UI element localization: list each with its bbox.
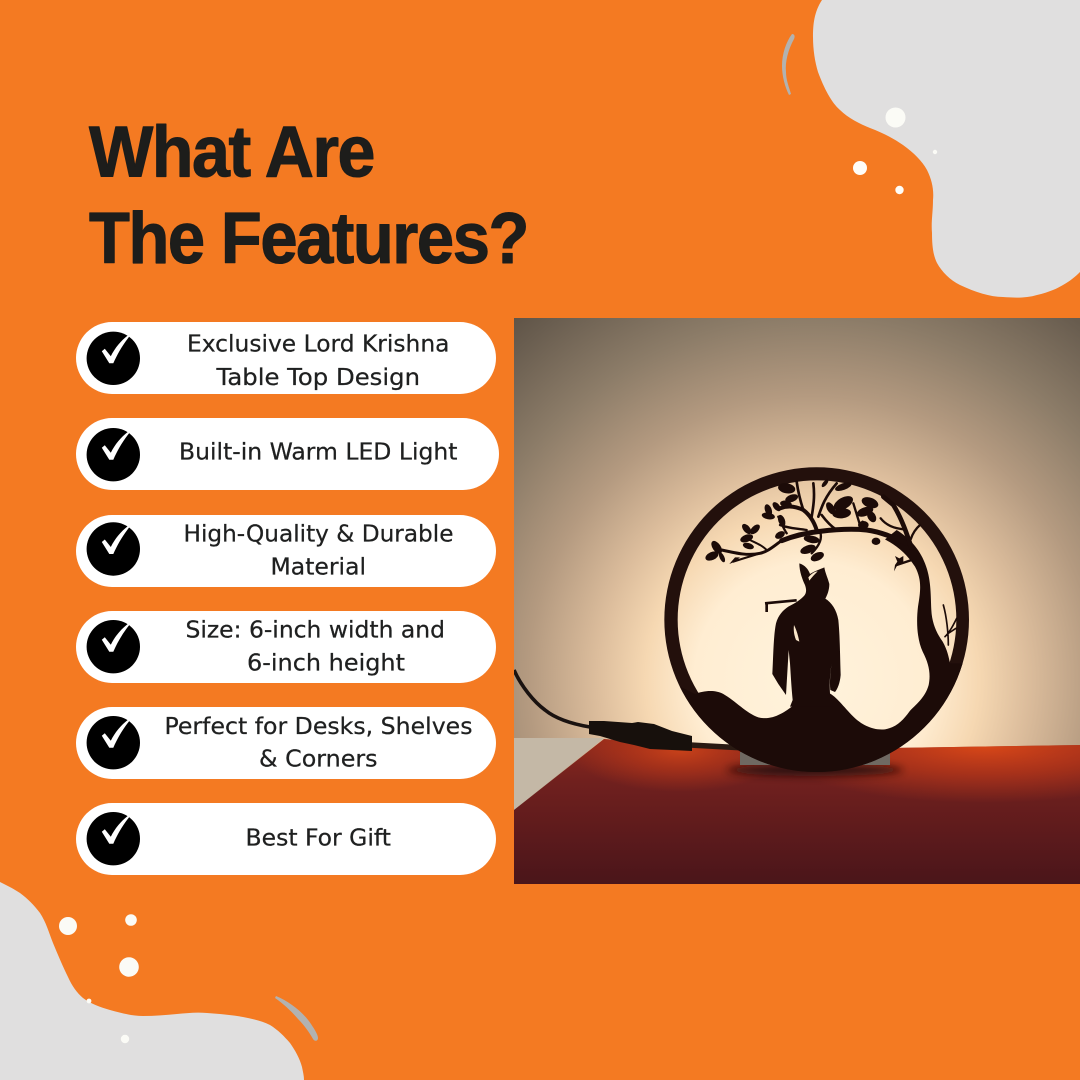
tree branches [722,482,957,645]
feature pill: Size: 6-inch height [247,649,405,677]
icon: check mark [87,332,140,385]
feature pill: Size: Size: 6-inch width and [186,616,445,644]
feature pill: Perfect for Desks, Shelves & Corners: & Corners [259,745,378,773]
feature pill: Exclusive Lord Krishna Table Top Design: Exclusive Lord Krishna [187,330,450,358]
power cable and connector [514,670,745,751]
title [89,112,528,279]
feature pill: Exclusive Lord Krishna Table Top Design [76,322,496,394]
icon: check mark [87,620,140,673]
lamp silhouette [664,467,977,783]
hills and tree trunk [680,530,963,771]
icon: check mark [87,428,140,481]
decorative blob: bottom left [0,882,318,1080]
decorative blob: top right [782,0,1080,298]
feature pill: Best For Gift: Best For Gift [246,823,391,851]
lamp ring [664,467,969,772]
icon: check mark [87,716,140,769]
feature pill: Best For Gift [76,803,496,875]
feature pill: Built-in Warm LED Light [76,418,499,490]
feature pill: Built-in Warm LED Light: Built-in Warm LED Light [179,438,458,466]
feature pill: High-Quality & Durable Material: High-Quality & Durable [184,520,454,548]
feature pill: High-Quality & Durable Material: Material [270,552,366,580]
Krishna figure with flute [765,563,841,707]
feature pill: High-Quality & Durable Material [76,515,496,587]
feature pill: Size [76,611,496,683]
tree leaves [704,478,903,571]
feature pill: Perfect for Desks, Shelves & Corners [76,707,496,779]
product photo: Krishna table lamp [514,318,1080,884]
icon: check mark [87,812,140,865]
table surface [514,739,1080,884]
feature pill: Exclusive Lord Krishna Table Top Design: Table Top Design [215,363,420,391]
title: The Features? [89,199,528,279]
icon: check mark [87,522,140,576]
lamp base plate [740,752,890,765]
feature pill: Perfect for Desks, Shelves & Corners: Perfect for Desks, Shelves [164,712,472,740]
title: What Are [89,112,374,192]
